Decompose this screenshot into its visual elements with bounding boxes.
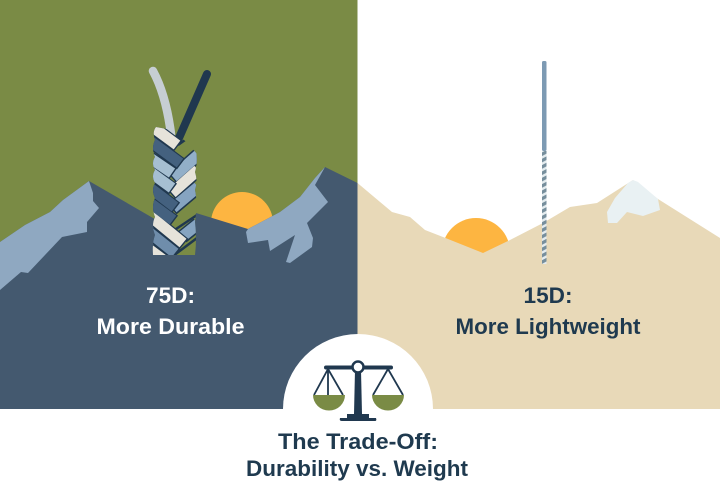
snow: right panel peak bbox=[607, 180, 660, 223]
thin rope: twisted strand bbox=[542, 151, 546, 264]
thin rope bbox=[542, 61, 546, 264]
sun: left bbox=[211, 192, 273, 254]
thin rope: solid strand bbox=[542, 61, 546, 151]
snow: left peak bbox=[0, 181, 99, 290]
label: More Durable: More Durable bbox=[96, 314, 244, 339]
mountains: left bbox=[0, 167, 358, 409]
thick braided rope bbox=[150, 71, 207, 266]
heading: The Trade-Off: The Trade-Off: bbox=[278, 429, 438, 454]
sun: right bbox=[442, 218, 510, 286]
label: 75D: 75D: bbox=[146, 283, 195, 308]
loose strand: light bbox=[153, 71, 171, 134]
icon: balance scale bbox=[313, 362, 404, 421]
heading: Durability vs. Weight: Durability vs. Weight bbox=[246, 456, 469, 481]
loose strand: dark bbox=[179, 74, 207, 138]
right-leaning strands bbox=[171, 155, 198, 237]
panel: 15D lightweight bbox=[358, 0, 720, 409]
label: 15D: 15D: bbox=[524, 283, 572, 308]
snow: right peak bbox=[246, 167, 328, 263]
panel: 75D durable bbox=[0, 0, 358, 409]
left-leaning strands bbox=[150, 125, 184, 266]
label: More Lightweight: More Lightweight bbox=[456, 314, 641, 339]
white dome bbox=[283, 334, 433, 409]
mountains: right bbox=[358, 180, 720, 409]
braid body bbox=[152, 127, 197, 255]
